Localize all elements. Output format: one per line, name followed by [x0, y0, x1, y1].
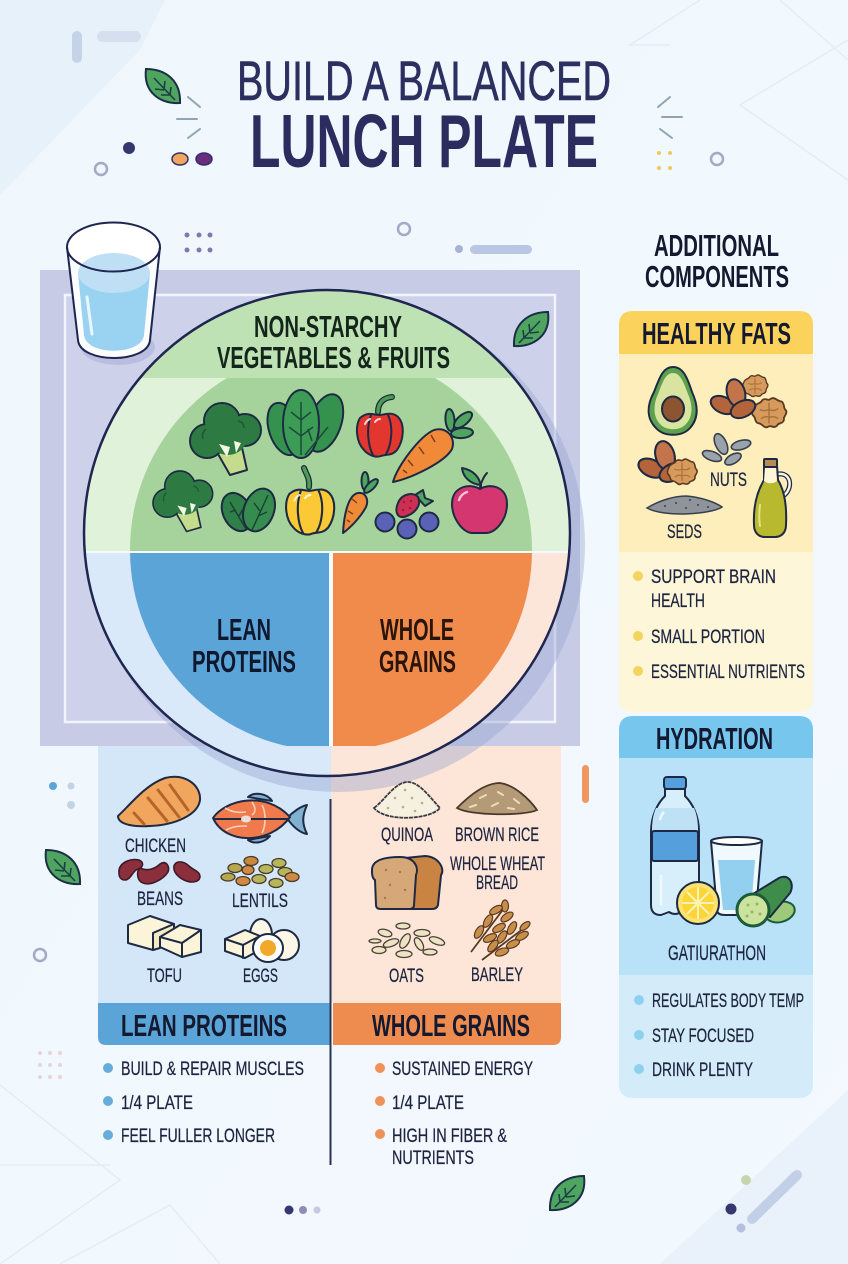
decorative pills top left	[72, 31, 141, 63]
icon: beans	[119, 860, 200, 884]
icon: glass of water	[711, 837, 762, 915]
decorative dots bottom center	[284, 1206, 320, 1214]
placemat	[40, 270, 580, 746]
hydration header: HYDRATION	[656, 721, 773, 756]
label: oats: OATS	[389, 965, 424, 987]
icon: chia seed pile	[647, 496, 722, 514]
icon: seeds	[701, 432, 752, 467]
icon: carrot large	[393, 409, 475, 482]
heading: non-starchy vegetables and fruits: NON-STARCHY	[254, 309, 402, 344]
icon: yellow pepper	[286, 468, 334, 535]
list: whole grain benefits	[375, 1058, 533, 1169]
icon: leaf on placemat	[514, 312, 548, 346]
label: quinoa: QUINOA	[381, 824, 433, 846]
label: chicken: CHICKEN	[125, 835, 186, 857]
label: seeds: SEDS	[667, 521, 702, 543]
heading: additional components	[645, 228, 789, 294]
icon: leaf left	[46, 850, 80, 884]
label: whole wheat bread: BREAD	[476, 872, 518, 894]
icon: apple	[452, 468, 507, 533]
heading: whole grains on plate	[379, 612, 456, 679]
list: whole grain benefits: SUSTAINED ENERGY	[392, 1058, 533, 1080]
list: lean protein benefits: FEEL FULLER LONGER	[121, 1125, 275, 1147]
list: lean protein benefits: 1/4 PLATE	[121, 1092, 193, 1114]
title	[237, 49, 611, 183]
decorative dots left of title	[95, 142, 212, 175]
icon: bread	[372, 856, 442, 909]
icon: water bottle	[651, 777, 699, 915]
heading: non-starchy vegetables and fruits: VEGETABLES & FRUITS	[217, 340, 450, 375]
icon: avocado	[649, 367, 697, 435]
decorative burst right	[658, 97, 682, 138]
icon: tofu	[128, 916, 201, 957]
decorative burst left	[177, 97, 200, 138]
panel: healthy fats	[619, 311, 813, 712]
whole grains header	[333, 1003, 561, 1045]
icon: broccoli small	[153, 471, 213, 532]
label: gatiurathon: GATIURATHON	[668, 942, 766, 965]
icon: salmon	[213, 794, 307, 843]
lean proteins header: LEAN PROTEINS	[121, 1008, 287, 1043]
title: LUNCH PLATE	[250, 99, 598, 183]
list: whole grain benefits: HIGH IN FIBER &	[392, 1125, 507, 1147]
healthy fats header	[619, 311, 813, 354]
icon: lentils	[221, 856, 299, 888]
icon: spinach large	[261, 389, 350, 459]
list: hydration benefits: STAY FOCUSED	[652, 1025, 754, 1047]
icon: quinoa	[374, 782, 440, 818]
label: whole wheat bread: WHOLE WHEAT	[450, 853, 545, 875]
heading: whole grains on plate: WHOLE	[380, 612, 454, 647]
label: beans: BEANS	[137, 888, 183, 910]
whole grains header: WHOLE GRAINS	[372, 1008, 530, 1043]
list: healthy fats benefits: HEALTH	[651, 590, 705, 612]
plate section: lean proteins	[125, 553, 329, 746]
list: lean protein benefits	[103, 1058, 304, 1147]
list: whole grain benefits: NUTRIENTS	[392, 1147, 474, 1169]
list: hydration benefits	[634, 990, 804, 1081]
icon: carrot small	[343, 472, 380, 533]
icon: strawberry and blueberries	[376, 490, 438, 538]
label: brown rice: BROWN RICE	[455, 824, 539, 846]
plate section: whole grains	[333, 553, 537, 746]
plate	[80, 285, 580, 783]
plate shadow	[91, 298, 585, 792]
decorative dots right of title	[657, 151, 723, 170]
icon: leaf bottom	[550, 1176, 584, 1210]
icon: broccoli large	[190, 403, 261, 475]
icon: spinach small	[216, 484, 281, 536]
icon: chicken	[118, 777, 200, 826]
icon: leaf top left	[146, 69, 180, 103]
heading: lean proteins on plate: PROTEINS	[192, 644, 296, 679]
panel: lean proteins	[98, 746, 331, 1045]
decorative dots above plate	[184, 223, 532, 254]
heading: whole grains on plate: GRAINS	[379, 644, 456, 679]
plate section: vegetables and fruits	[125, 378, 535, 551]
panel: whole grains	[331, 746, 561, 1045]
decorative accents beside lower panels	[34, 765, 589, 1079]
icon: eggs	[225, 919, 299, 962]
heading: lean proteins on plate: LEAN	[217, 612, 271, 647]
icon: lemon slice	[677, 882, 719, 924]
heading: lean proteins on plate	[192, 612, 296, 679]
list: healthy fats benefits: SUPPORT BRAIN	[651, 566, 776, 588]
divider between lean proteins and whole grains	[330, 799, 332, 1165]
list: whole grain benefits: 1/4 PLATE	[392, 1092, 464, 1114]
list: healthy fats benefits	[633, 566, 805, 683]
list: hydration benefits: DRINK PLENTY	[652, 1059, 753, 1081]
decorative accents bottom right	[726, 1175, 797, 1232]
icon: barley	[471, 900, 532, 960]
label: lentils: LENTILS	[232, 890, 288, 912]
icon: oats	[369, 923, 446, 958]
icon: almonds and walnut lower	[635, 439, 697, 486]
label: nuts: NUTS	[710, 469, 747, 491]
label: whole wheat bread	[450, 853, 545, 894]
icon: cucumber	[737, 877, 797, 926]
label: eggs: EGGS	[243, 965, 278, 987]
heading: additional components: ADDITIONAL	[654, 228, 779, 263]
heading: non-starchy vegetables and fruits	[217, 309, 450, 375]
icon: almonds and walnuts upper	[708, 375, 786, 427]
icon: red pepper	[357, 397, 403, 457]
title: BUILD A BALANCED	[237, 49, 611, 112]
panel: hydration	[619, 716, 813, 1098]
icon: water glass	[67, 222, 160, 365]
list: lean protein benefits: BUILD & REPAIR MUSCLES	[121, 1058, 304, 1080]
label: barley: BARLEY	[471, 964, 523, 986]
icon: olive oil bottle	[754, 459, 790, 537]
label: tofu: TOFU	[147, 965, 182, 987]
icon: brown rice	[457, 783, 537, 814]
list: healthy fats benefits: SMALL PORTION	[651, 626, 765, 648]
hydration header	[619, 716, 813, 758]
lean proteins header	[98, 1003, 330, 1045]
